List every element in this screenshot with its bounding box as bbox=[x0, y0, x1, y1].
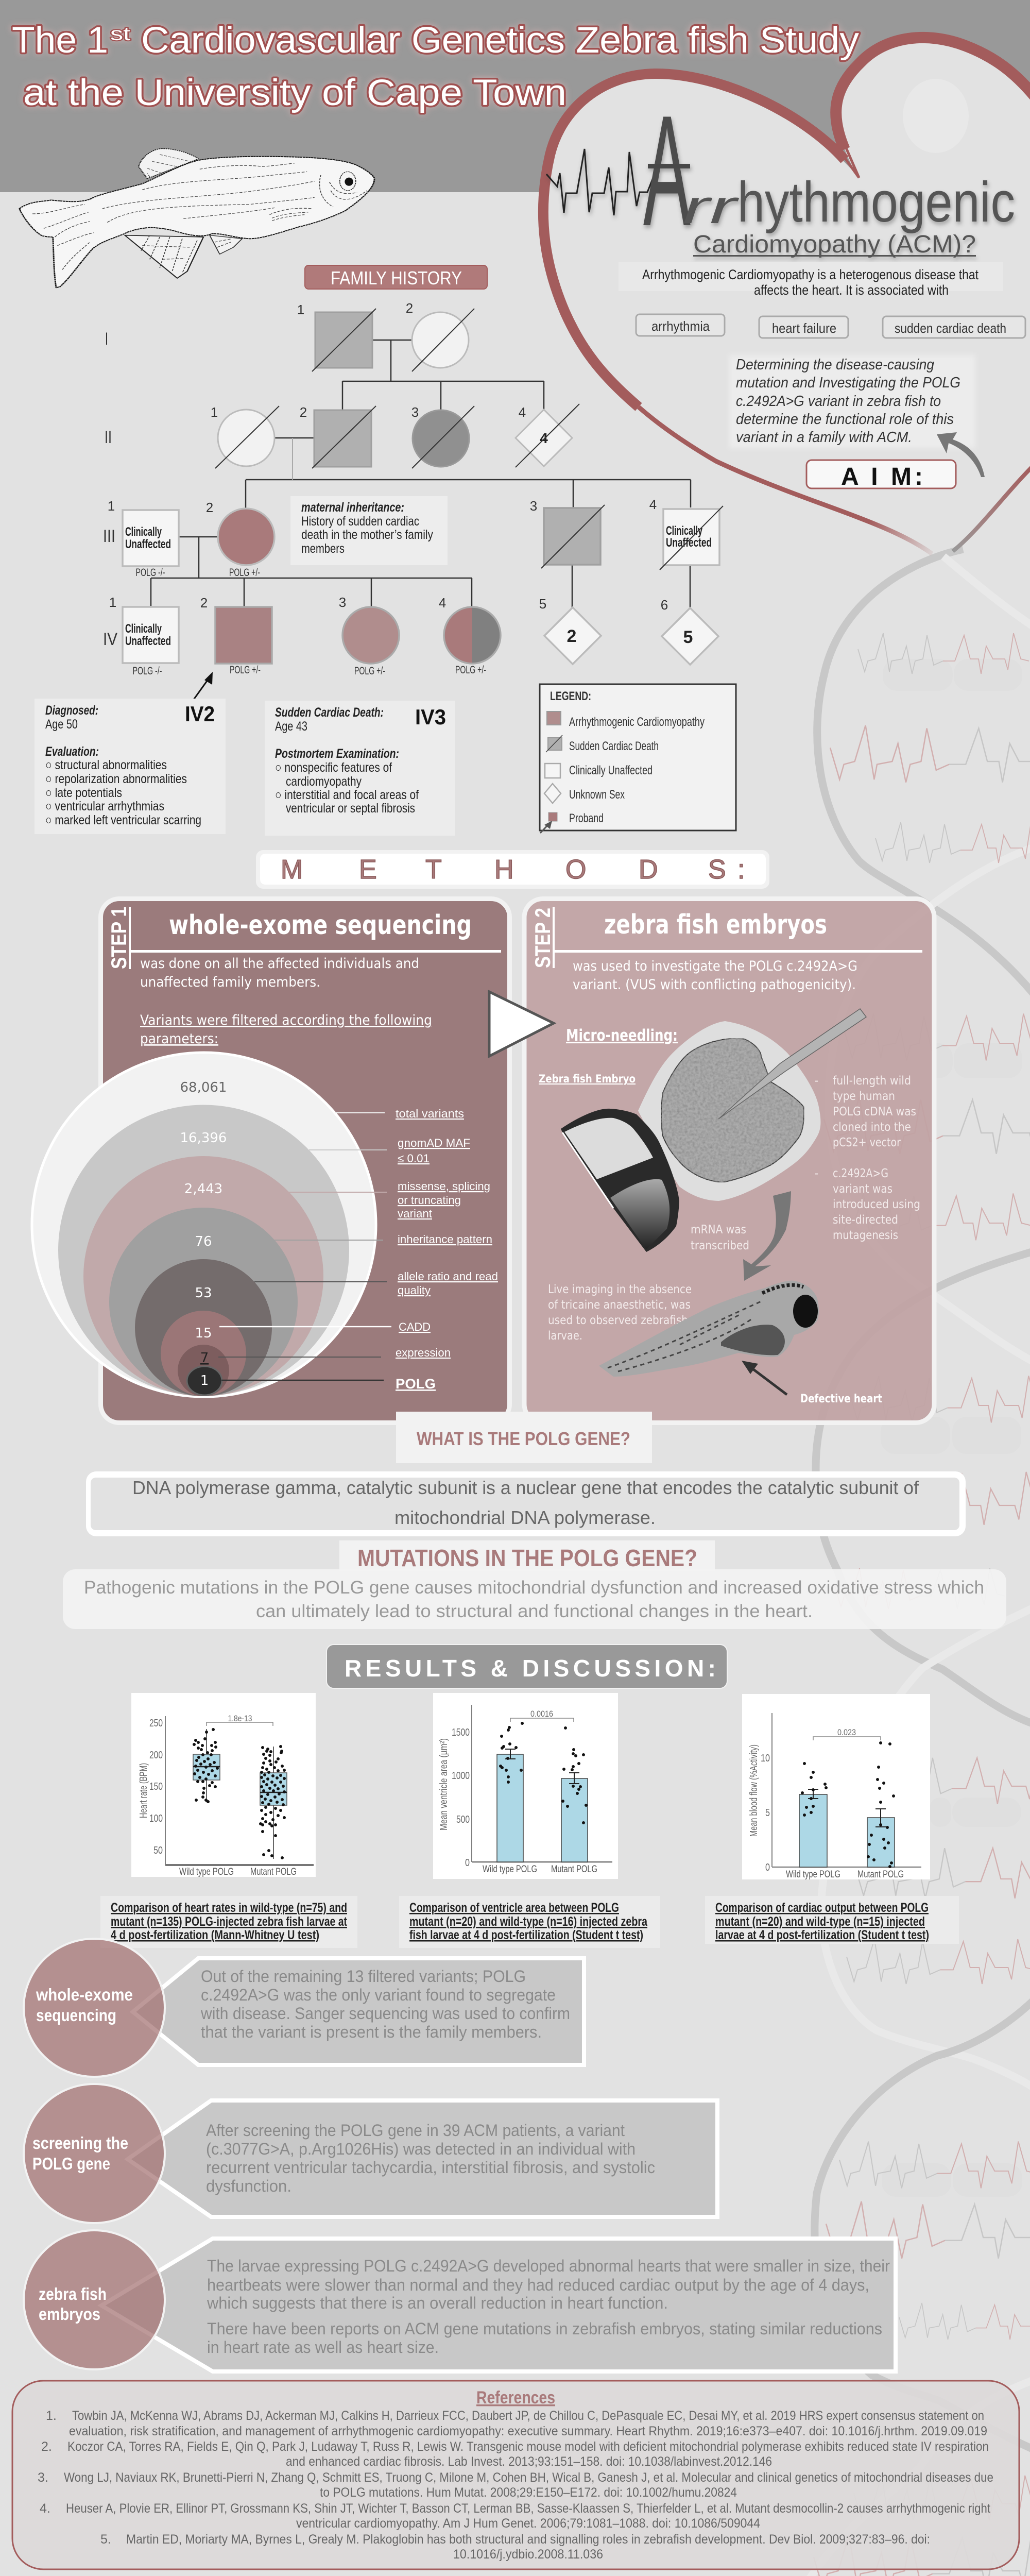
result row: screening the POLG gene: After screening the POLG gene in 39 ACM patients, a variant bbox=[206, 2121, 625, 2140]
pedigree chart: 4 bbox=[519, 404, 526, 420]
panel: references: ventricular cardiomyopathy. Am J Hum Genet. 2006;79:1081–1088. doi: 10.1086/509044 bbox=[296, 2516, 760, 2531]
panel: references: References bbox=[476, 2388, 555, 2408]
nested circles filter funnel bbox=[32, 1053, 376, 1397]
panel: references: 1. bbox=[46, 2409, 57, 2423]
result row: screening the POLG gene: recurrent ventricular tachycardia, interstitial fibrosis, and systolic bbox=[206, 2158, 655, 2177]
heading: results and discussion: RESULTS & DISCUSSION: bbox=[345, 1655, 716, 1682]
chart: heart rate box plot: Mutant POLG bbox=[250, 1867, 297, 1877]
chart: heart rate box plot bbox=[131, 1693, 316, 1877]
step 1 label bbox=[107, 907, 501, 969]
heading: arrhythmogenic cardiomyopathy logo: Cardiomyopathy (ACM)? bbox=[693, 231, 976, 258]
caption: heart rate chart: mutant (n=135) POLG-injected zebra fish larvae at bbox=[111, 1914, 348, 1929]
nested circles filter funnel: 76 bbox=[195, 1234, 212, 1249]
text block: POLG definition bbox=[86, 1471, 966, 1536]
heading: what is the POLG gene bbox=[396, 1412, 652, 1463]
step 2 label: STEP 2 bbox=[530, 908, 555, 968]
panel: IV2 clinical details: ○ late potentials bbox=[45, 786, 122, 800]
filter labels: total variants bbox=[396, 1107, 464, 1120]
pedigree chart: 2 bbox=[406, 300, 413, 316]
filter labels: ≤ 0.01 bbox=[398, 1152, 430, 1165]
panel: IV2 clinical details: ○ structural abnormalities bbox=[45, 758, 167, 772]
micro-injection notes: - bbox=[815, 1074, 818, 1088]
chart: heart rate box plot: 1.8e-13 bbox=[228, 1714, 252, 1723]
result row: zebra fish embryos: heartbeats were slower than normal and they had reduced cardiac output by the age of 4 days, bbox=[207, 2276, 869, 2294]
nested circles filter funnel: 1 bbox=[200, 1373, 209, 1388]
chart: ventricle area bar chart: Wild type POLG bbox=[483, 1864, 537, 1875]
arrow: defective heart bbox=[742, 1361, 787, 1395]
chart: cardiac output bar chart: Mutant POLG bbox=[857, 1869, 904, 1880]
micro-injection notes bbox=[548, 1074, 920, 1343]
caption: heart rate chart: 4 d post-fertilization (Mann-Whitney U test) bbox=[111, 1928, 319, 1942]
micro-injection notes: site-directed bbox=[833, 1213, 898, 1227]
micro-injection notes: introduced using bbox=[833, 1198, 920, 1211]
result row: whole-exome sequencing bbox=[24, 1939, 584, 2077]
result row: zebra fish embryos: embryos bbox=[39, 2304, 100, 2324]
chart: cardiac output bar chart: 0.023 bbox=[837, 1727, 856, 1737]
heading: what is the POLG gene: WHAT IS THE POLG GENE? bbox=[417, 1428, 630, 1449]
heading: methods bbox=[256, 850, 769, 889]
filter labels: expression bbox=[396, 1346, 451, 1359]
pedigree chart: 1 bbox=[211, 404, 218, 420]
result row: whole-exome sequencing: sequencing bbox=[36, 2006, 116, 2025]
aim statement bbox=[729, 355, 975, 448]
panel: IV2 clinical details: ○ marked left ventricular scarring bbox=[45, 813, 201, 827]
step 1 label: STEP 1 bbox=[107, 907, 131, 969]
legend: Sudden Cardiac Death bbox=[569, 739, 659, 753]
arrow: transcription bbox=[743, 1191, 791, 1281]
panel: IV3 clinical details: cardiomyopathy bbox=[286, 774, 362, 789]
callout: maternal inheritance: members bbox=[301, 541, 345, 556]
pedigree chart: III bbox=[103, 527, 115, 546]
intro text block: affects the heart. It is associated with bbox=[754, 282, 949, 298]
filter labels: allele ratio and read bbox=[398, 1270, 498, 1283]
generation IV symbols: 5 bbox=[683, 628, 693, 647]
generation III symbols: Clinically bbox=[125, 525, 162, 539]
associated conditions pills bbox=[636, 314, 1025, 338]
panel: IV3 clinical details: Age 43 bbox=[275, 719, 307, 734]
pedigree chart: 3 bbox=[411, 404, 419, 420]
step 2 description: Zebra fish Embryo bbox=[539, 1073, 636, 1085]
POLG genotype labels: POLG +/- bbox=[455, 664, 486, 676]
heading: arrhythmogenic cardiomyopathy logo: A bbox=[643, 82, 691, 259]
associated conditions pills: arrhythmia bbox=[651, 318, 710, 334]
generation II symbols bbox=[215, 404, 579, 468]
chart: heart rate box plot: Heart rate (BPM) bbox=[138, 1763, 149, 1818]
filter labels bbox=[396, 1107, 498, 1392]
POLG genotype labels: POLG +/- bbox=[230, 664, 261, 676]
panel: IV3 clinical details: ○ nonspecific features of bbox=[275, 760, 392, 775]
aim badge bbox=[806, 460, 956, 490]
legend: LEGEND: bbox=[550, 689, 591, 703]
POLG genotype labels: POLG +/- bbox=[229, 567, 260, 579]
arrow: proband pointer bbox=[192, 672, 213, 702]
result row: screening the POLG gene: (c.3077G>A, p.Arg1026His) was detected in an individual with bbox=[206, 2140, 636, 2158]
filter labels: inheritance pattern bbox=[398, 1233, 492, 1246]
result row: whole-exome sequencing: c.2492A>G was the only variant found to segregate bbox=[201, 1986, 556, 2004]
panel: IV3 clinical details bbox=[265, 701, 455, 836]
callout: maternal inheritance: death in the mother’s family bbox=[301, 528, 433, 542]
generation IV symbols bbox=[123, 607, 718, 665]
panel: references bbox=[12, 2381, 1019, 2569]
panel: IV3 clinical details: Sudden Cardiac Death: bbox=[275, 705, 384, 720]
caption: heart rate chart: Comparison of heart rates in wild-type (n=75) and bbox=[111, 1901, 347, 1915]
micro-injection notes: Live imaging in the absence bbox=[548, 1283, 692, 1296]
text block: mutations panel: can ultimately lead to structural and functional changes in the heart. bbox=[256, 1601, 813, 1621]
panel: IV2 clinical details: ○ repolarization abnormalities bbox=[45, 772, 187, 786]
result row: whole-exome sequencing: that the variant is present is the family members. bbox=[201, 2023, 542, 2041]
panel: IV3 clinical details: Postmortem Examination: bbox=[275, 747, 399, 761]
title: st bbox=[110, 23, 131, 44]
POLG genotype labels: POLG +/- bbox=[354, 665, 385, 677]
result row: screening the POLG gene: POLG gene bbox=[32, 2154, 110, 2173]
caption: ventricle area chart bbox=[399, 1896, 660, 1948]
heading: arrhythmogenic cardiomyopathy logo: rr bbox=[683, 181, 740, 233]
pedigree chart: 2 bbox=[300, 404, 307, 420]
micro-injection notes: of tricaine anaesthetic, was bbox=[548, 1298, 691, 1312]
legend: Clinically Unaffected bbox=[569, 764, 653, 777]
embryo micrograph bbox=[561, 1009, 866, 1252]
result row: zebra fish embryos bbox=[24, 2230, 896, 2371]
aim statement: determine the functional role of this bbox=[736, 411, 954, 428]
result row: zebra fish embryos: in heart rate as well as heart size. bbox=[207, 2338, 439, 2357]
arrow: aim to statement bbox=[937, 432, 985, 477]
POLG genotype labels: POLG -/- bbox=[133, 665, 162, 677]
micro-injection notes: larvae. bbox=[548, 1329, 582, 1343]
chart: heart rate box plot: 100 bbox=[149, 1813, 163, 1824]
chart: cardiac output bar chart: 0 bbox=[765, 1862, 770, 1873]
step 1 description: Variants were filtered according the following bbox=[140, 1012, 432, 1028]
panel: IV2 clinical details: IV2 bbox=[185, 702, 215, 726]
pedigree chart: 4 bbox=[649, 497, 657, 512]
generation II symbols: 4 bbox=[540, 430, 548, 446]
callout: maternal inheritance: maternal inheritance: bbox=[301, 500, 404, 515]
panel: references: 10.1016/j.ydbio.2008.11.036 bbox=[453, 2547, 603, 2562]
POLG genotype labels: POLG -/- bbox=[136, 567, 165, 579]
title: The 1 bbox=[12, 20, 108, 61]
filter labels: variant bbox=[398, 1207, 432, 1220]
text block: mutations panel: MUTATIONS IN THE POLG GENE? bbox=[357, 1545, 697, 1571]
panel: references: 3. bbox=[38, 2470, 48, 2485]
filter labels: gnomAD MAF bbox=[398, 1137, 470, 1149]
filter labels: POLG bbox=[396, 1376, 436, 1392]
generation III symbols: Clinically bbox=[666, 524, 702, 538]
chart: heart rate box plot: 200 bbox=[149, 1750, 163, 1761]
legend bbox=[540, 684, 736, 833]
pedigree chart: IV bbox=[103, 630, 117, 649]
result row: screening the POLG gene: screening the bbox=[32, 2133, 128, 2153]
chart: cardiac output bar chart: Mean blood flow (%Activity) bbox=[748, 1744, 760, 1837]
step 2 description: Micro-needling: bbox=[566, 1026, 678, 1045]
micro-injection notes: mutagenesis bbox=[833, 1229, 898, 1242]
step 1 description: parameters: bbox=[140, 1031, 218, 1047]
chart: heart rate box plot: 150 bbox=[149, 1781, 163, 1792]
micro-injection notes: POLG cDNA was bbox=[833, 1105, 916, 1118]
legend: Unknown Sex bbox=[569, 788, 625, 802]
aim statement: c.2492A>G variant in zebra fish to bbox=[736, 393, 941, 410]
callout: maternal inheritance bbox=[290, 496, 448, 565]
chart: ventricle area bar chart: Mutant POLG bbox=[551, 1864, 597, 1875]
caption: ventricle area chart: mutant (n=20) and wild-type (n=16) injected zebra bbox=[409, 1914, 648, 1929]
generation IV symbols: 2 bbox=[567, 626, 576, 646]
micro-injection notes: - bbox=[815, 1167, 818, 1180]
aim statement: mutation and Investigating the POLG bbox=[736, 375, 960, 391]
panel: IV3 clinical details: ○ interstitial and focal areas of bbox=[275, 788, 419, 802]
generation I symbols bbox=[312, 309, 474, 371]
title: Cardiovascular Genetics Zebra fish Study bbox=[141, 20, 860, 61]
chart: cardiac output bar chart bbox=[742, 1694, 930, 1880]
chart: ventricle area bar chart: 0 bbox=[465, 1857, 470, 1869]
caption: ventricle area chart: Comparison of ventricle area between POLG bbox=[409, 1901, 619, 1915]
result row: zebra fish embryos: zebra fish bbox=[39, 2284, 107, 2303]
chart: heart rate box plot: 50 bbox=[153, 1845, 163, 1856]
pedigree chart: 6 bbox=[661, 597, 668, 613]
step 2 description bbox=[539, 958, 857, 1085]
panel: references: 4. bbox=[40, 2501, 50, 2516]
step 2 description: was used to investigate the POLG c.2492A>G bbox=[573, 958, 857, 974]
text block: POLG definition: DNA polymerase gamma, catalytic subunit is a nuclear gene that encodes the catalytic subunit of bbox=[132, 1477, 919, 1498]
micro-injection notes: full-length wild bbox=[833, 1074, 911, 1088]
zebrafish illustration bbox=[20, 148, 374, 287]
panel: IV2 clinical details: Age 50 bbox=[45, 717, 78, 732]
nested circles filter funnel: 15 bbox=[195, 1326, 212, 1341]
pedigree chart: 1 bbox=[109, 595, 116, 610]
panel: IV3 clinical details: ventricular or septal fibrosis bbox=[286, 801, 415, 816]
caption: cardiac output chart: mutant (n=20) and wild-type (n=15) injected bbox=[715, 1914, 925, 1929]
micro-injection notes: type human bbox=[833, 1090, 895, 1103]
generation IV symbols: Unaffected bbox=[125, 634, 171, 648]
generation III symbols bbox=[123, 505, 723, 570]
nested circles filter funnel: 2,443 bbox=[184, 1181, 222, 1197]
panel: step 1 whole-exome sequencing bbox=[32, 899, 510, 1423]
arrow: step 1 to step 2 bbox=[489, 992, 554, 1056]
filter leader lines bbox=[218, 1113, 391, 1380]
chart: cardiac output bar chart: Wild type POLG bbox=[786, 1869, 840, 1880]
panel: IV3 clinical details: IV3 bbox=[415, 705, 446, 729]
caption: cardiac output chart bbox=[705, 1896, 959, 1944]
pedigree chart bbox=[103, 300, 723, 677]
heading: family history: FAMILY HISTORY bbox=[331, 267, 462, 289]
generation III symbols: Unaffected bbox=[666, 536, 712, 550]
larva micrograph bbox=[599, 1281, 819, 1377]
result row: zebra fish embryos: There have been reports on ACM gene mutations in zebrafish embryos, stating similar reductions bbox=[207, 2319, 882, 2338]
panel: references: 5. bbox=[100, 2532, 111, 2547]
micro-injection notes: c.2492A>G bbox=[833, 1167, 888, 1180]
panel: IV2 clinical details: ○ ventricular arrhythmias bbox=[45, 799, 164, 814]
text block: mutations panel bbox=[63, 1540, 1006, 1629]
POLG genotype labels bbox=[133, 567, 486, 677]
micro-injection notes: cloned into the bbox=[833, 1121, 911, 1134]
step 1 description: was done on all the affected individuals and bbox=[140, 956, 419, 972]
caption: heart rate chart bbox=[100, 1896, 357, 1948]
step 1 description: unaffected family members. bbox=[140, 974, 320, 990]
panel: references: 2. bbox=[41, 2439, 52, 2454]
step 1 label: whole-exome sequencing bbox=[169, 910, 472, 941]
text block: POLG definition: mitochondrial DNA polymerase. bbox=[394, 1507, 656, 1528]
pedigree chart: I bbox=[105, 329, 108, 349]
panel: IV2 clinical details bbox=[35, 699, 226, 834]
intro text block: Arrhythmogenic Cardiomyopathy is a heterogenous disease that bbox=[642, 267, 978, 282]
micro-injection notes: mRNA was bbox=[691, 1223, 746, 1236]
result row: screening the POLG gene bbox=[24, 2084, 717, 2223]
micro-injection notes: used to observed zebrafish bbox=[548, 1314, 688, 1327]
result row: whole-exome sequencing: Out of the remaining 13 filtered variants; POLG bbox=[201, 1967, 526, 1986]
associated conditions pills: sudden cardiac death bbox=[895, 320, 1006, 336]
aim badge: A I M: bbox=[841, 463, 923, 490]
result row: whole-exome sequencing: whole-exome bbox=[36, 1985, 133, 2004]
chart: ventricle area bar chart: 1500 bbox=[452, 1727, 470, 1738]
nested circles filter funnel: 53 bbox=[195, 1285, 212, 1301]
panel: IV2 clinical details: Diagnosed: bbox=[45, 703, 98, 718]
result row: whole-exome sequencing: with disease. Sanger sequencing was used to confirm bbox=[200, 2004, 570, 2023]
associated conditions pills: heart failure bbox=[772, 320, 836, 336]
step 2 label: zebra fish embryos bbox=[604, 909, 827, 940]
nested circles filter funnel: 7 bbox=[200, 1350, 209, 1366]
micro-injection notes: variant was bbox=[833, 1182, 892, 1196]
text block: mutations panel: Pathogenic mutations in the POLG gene causes mitochondrial dysfunction and increased oxidative stress which bbox=[84, 1578, 984, 1598]
aim statement: Determining the disease-causing bbox=[736, 357, 934, 373]
chart: ventricle area bar chart: 500 bbox=[456, 1814, 470, 1825]
chart: heart rate box plot: Wild type POLG bbox=[179, 1867, 234, 1877]
chart: cardiac output bar chart: 10 bbox=[761, 1753, 770, 1764]
step 2 label bbox=[530, 907, 922, 968]
heading: arrhythmogenic cardiomyopathy logo bbox=[546, 82, 1015, 259]
caption: ventricle area chart: fish larvae at 4 d post-fertilization (Student t test) bbox=[409, 1928, 643, 1942]
chart: ventricle area bar chart: Mean ventricle area (µm²) bbox=[438, 1738, 450, 1831]
result row: zebra fish embryos: which suggests that there is an overall reduction in heart function. bbox=[207, 2294, 668, 2312]
defective heart label: Defective heart bbox=[800, 1393, 882, 1405]
chart: heart rate box plot: 250 bbox=[149, 1718, 163, 1729]
pedigree chart: 1 bbox=[108, 498, 115, 514]
title: at the University of Cape Town bbox=[23, 73, 566, 113]
chart: ventricle area bar chart bbox=[433, 1693, 618, 1879]
result row: zebra fish embryos: The larvae expressing POLG c.2492A>G developed abnormal hearts that were smaller in size, their bbox=[207, 2257, 890, 2275]
heading: results and discussion bbox=[327, 1645, 727, 1688]
caption: cardiac output chart: larvae at 4 d post-fertilization (Student t test) bbox=[715, 1928, 929, 1942]
pedigree chart: 3 bbox=[339, 595, 346, 610]
result row: screening the POLG gene: dysfunction. bbox=[206, 2177, 291, 2195]
pedigree chart: 2 bbox=[206, 500, 213, 515]
generation IV symbols: Clinically bbox=[125, 622, 162, 636]
callout: maternal inheritance: History of sudden cardiac bbox=[301, 514, 419, 529]
step 2 description: variant. (VUS with conflicting pathogenicity). bbox=[573, 977, 856, 993]
pedigree chart: 5 bbox=[539, 596, 546, 612]
chart: ventricle area bar chart: 1000 bbox=[452, 1770, 470, 1782]
title bbox=[12, 20, 860, 113]
micro-injection notes: transcribed bbox=[691, 1239, 749, 1252]
panel: step 2 zebra fish embryos bbox=[524, 899, 934, 1423]
intro text block bbox=[619, 262, 1003, 298]
pedigree chart: II bbox=[105, 428, 112, 447]
micro-injection notes: pCS2+ vector bbox=[833, 1136, 901, 1149]
chart: cardiac output bar chart: 5 bbox=[765, 1807, 770, 1819]
caption: cardiac output chart: Comparison of cardiac output between POLG bbox=[715, 1901, 929, 1915]
filter labels: or truncating bbox=[398, 1194, 461, 1207]
pedigree chart: 3 bbox=[530, 498, 537, 514]
filter labels: CADD bbox=[399, 1320, 431, 1333]
chart: ventricle area bar chart: 0.0016 bbox=[530, 1709, 553, 1719]
filter labels: missense, splicing bbox=[398, 1180, 490, 1193]
generation III symbols: Unaffected bbox=[125, 537, 171, 551]
legend: Arrhythmogenic Cardiomyopathy bbox=[569, 715, 705, 729]
nested circles filter funnel: 16,396 bbox=[180, 1130, 227, 1146]
aim statement: variant in a family with ACM. bbox=[736, 429, 912, 446]
panel: IV2 clinical details: Evaluation: bbox=[45, 744, 99, 759]
legend: Proband bbox=[569, 811, 604, 825]
heading: methods: METHODS: bbox=[281, 855, 745, 885]
heart outline bbox=[543, 38, 1030, 554]
step 1 description bbox=[140, 956, 432, 1047]
filter labels: quality bbox=[398, 1284, 431, 1297]
nested circles filter funnel: 68,061 bbox=[180, 1080, 227, 1095]
pedigree chart: 4 bbox=[439, 595, 446, 611]
panel: references: Martin ED, Moriarty MA, Byrnes L, Grealy M. Plakoglobin has both structural and signalling roles in zebrafish development. Dev Biol. 2009;327:83–96. doi: bbox=[126, 2532, 930, 2547]
pedigree chart: 2 bbox=[200, 595, 208, 611]
panel: references: to POLG mutations. Hum Mutat. 2008;29:E150–E172. doi: 10.1002/humu.20824 bbox=[320, 2485, 737, 2500]
panel: references: and enhanced cardiac fibrosis. Lab Invest. 2013;93:151–158. doi: 10.1038/labinvest.2012.146 bbox=[286, 2454, 772, 2469]
pedigree chart: 1 bbox=[297, 302, 304, 317]
